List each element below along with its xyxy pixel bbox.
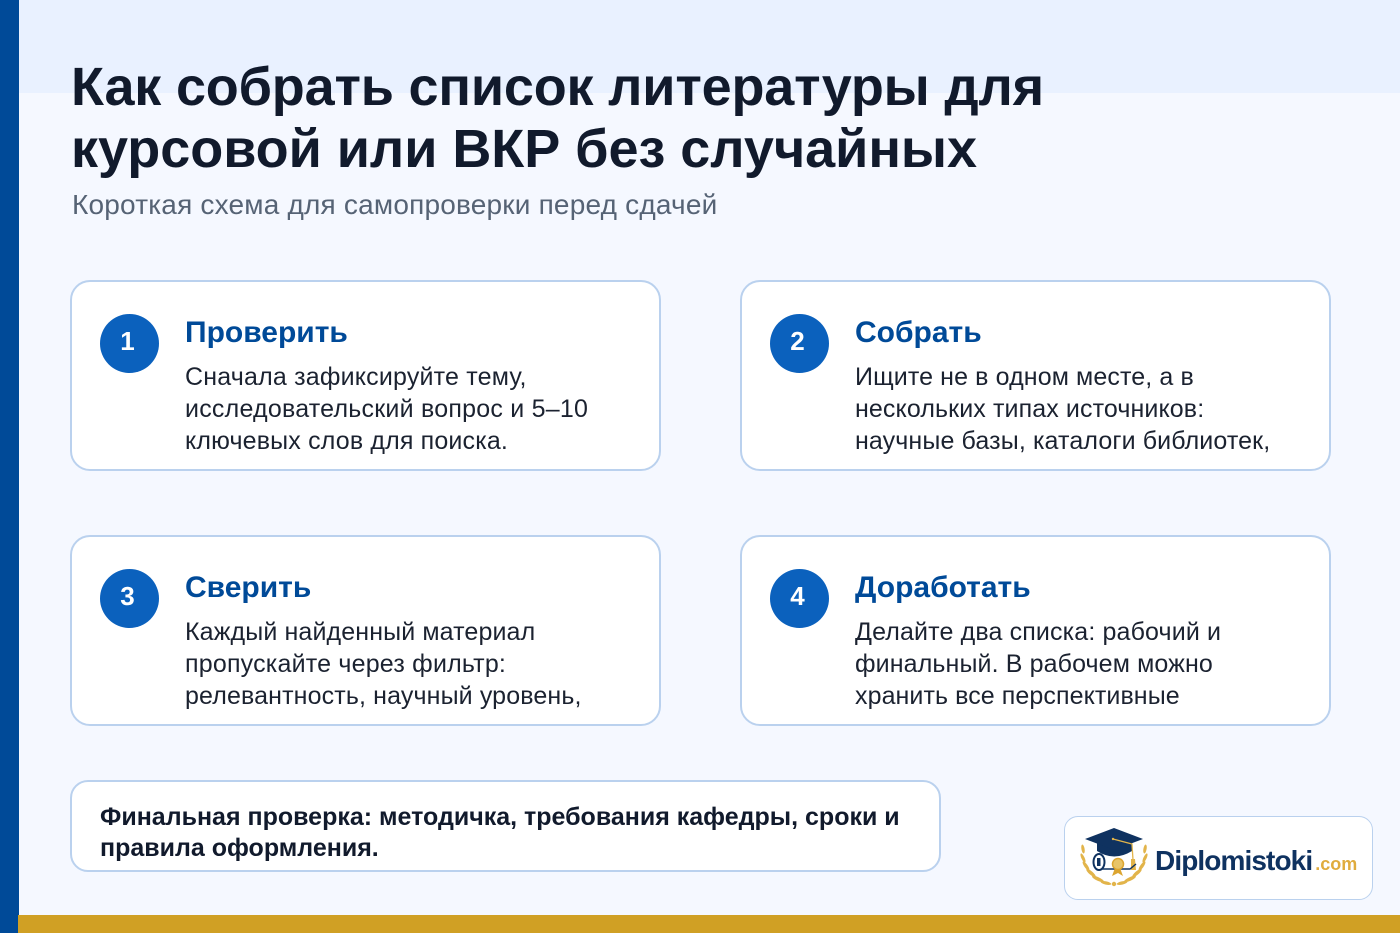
step 2 heading: Собрать — [855, 316, 982, 349]
step 4 text: финальный. В рабочем можно — [855, 650, 1213, 678]
step 3 text — [185, 618, 582, 710]
bottom accent bar — [18, 915, 1400, 933]
panel: step 4 — [740, 535, 1331, 726]
step 2 text — [855, 363, 1270, 455]
step 2 number — [770, 314, 829, 373]
left accent bar — [0, 0, 19, 933]
header band — [19, 0, 1400, 93]
step 2 text: Ищите не в одном месте, а в — [855, 363, 1194, 391]
step 4 text — [855, 618, 1221, 710]
step 3 heading: Сверить — [185, 571, 311, 604]
logo wordmark: Diplomistoki.com — [1155, 845, 1357, 876]
title: Как собрать список литературы для — [71, 57, 1044, 117]
logo panel — [1064, 816, 1373, 900]
step 3 text: Каждый найденный материал — [185, 618, 535, 646]
panel: step 1 — [70, 280, 661, 471]
step 3 number: 3 — [120, 581, 135, 611]
step 1 number — [100, 314, 159, 373]
callout: final check: Финальная проверка: методичка, требования кафедры, сроки и — [100, 803, 900, 831]
step 1 text: Сначала зафиксируйте тему, — [185, 363, 527, 391]
step 3 text: пропускайте через фильтр: — [185, 650, 506, 678]
callout: final check — [70, 780, 941, 872]
step 1 heading: Проверить — [185, 316, 348, 349]
step 1 text — [185, 363, 588, 455]
step 2 text: научные базы, каталоги библиотек, — [855, 427, 1270, 455]
title: курсовой или ВКР без случайных — [71, 119, 977, 179]
panel: step 3 — [70, 535, 661, 726]
step 1 number: 1 — [120, 326, 135, 356]
step 4 number — [770, 569, 829, 628]
title — [71, 57, 1044, 179]
step 3 number — [100, 569, 159, 628]
icon: graduation cap with laurel — [1080, 828, 1148, 886]
step 2 number: 2 — [790, 326, 805, 356]
callout: final check: правила оформления. — [100, 834, 379, 862]
step 4 text: хранить все перспективные — [855, 682, 1180, 710]
step 2 text: нескольких типах источников: — [855, 395, 1204, 423]
panel: step 2 — [740, 280, 1331, 471]
step 1 text: исследовательский вопрос и 5–10 — [185, 395, 588, 423]
step 4 number: 4 — [790, 581, 805, 611]
step 3 text: релевантность, научный уровень, — [185, 682, 582, 710]
step 4 heading: Доработать — [855, 571, 1031, 604]
subtitle: Короткая схема для самопроверки перед сдачей — [72, 189, 717, 220]
step 4 text: Делайте два списка: рабочий и — [855, 618, 1221, 646]
step 1 text: ключевых слов для поиска. — [185, 427, 508, 455]
